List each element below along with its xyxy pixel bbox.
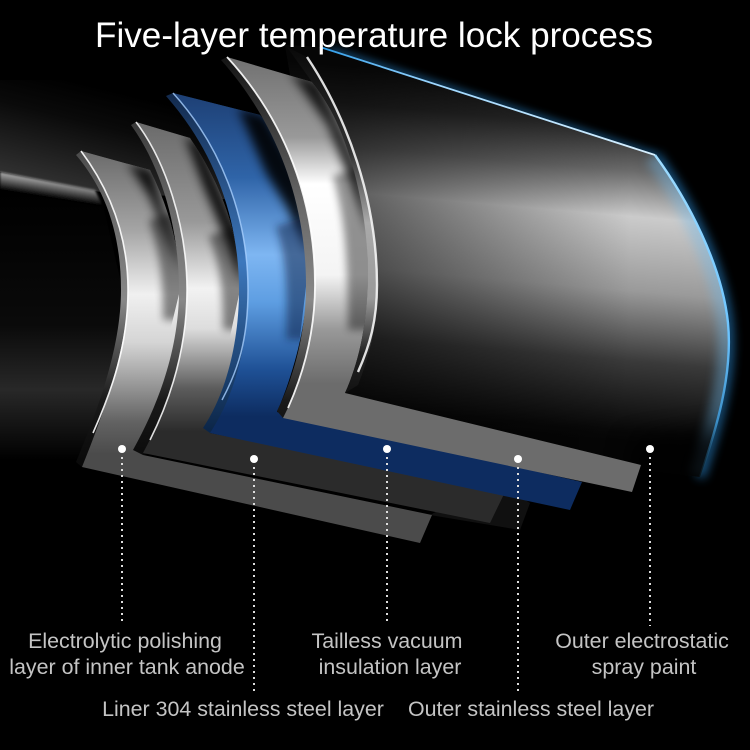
layer 2: liner 304 stainless steel [131, 122, 505, 523]
body surface [285, 45, 729, 477]
callout 1 [118, 445, 126, 622]
label: outer electrostatic spray paint: Outer electrostatic [555, 629, 729, 653]
callout 5 [646, 445, 654, 626]
callout 3 [383, 445, 391, 624]
callout dots and dotted leaders [118, 445, 654, 692]
layer 3: blue tailless vacuum insulation [166, 93, 582, 510]
label: outer electrostatic spray paint: spray paint [592, 655, 696, 679]
label: tailless vacuum insulation: Tailless vacuum [312, 629, 462, 653]
label: electrolytic polishing layer: Electrolytic polishing [28, 629, 222, 653]
layer 1: electrolytic polishing layer plate [76, 151, 432, 543]
label: liner 304 stainless steel: Liner 304 stainless steel layer [102, 697, 384, 721]
label: electrolytic polishing layer: layer of inner tank anode [9, 655, 245, 679]
callout 4 [514, 455, 522, 692]
glow lines [320, 47, 729, 477]
label: outer stainless steel: Outer stainless steel layer [408, 697, 654, 721]
label: tailless vacuum insulation: insulation layer [319, 655, 461, 679]
inner tank on left [0, 80, 240, 460]
title: Five-layer temperature lock process [95, 16, 653, 55]
outer tank body with blue glow [285, 45, 745, 500]
layer: inner plate shadow [430, 480, 530, 530]
layer 4: outer stainless steel [221, 57, 641, 492]
layer 5: outer spray paint rim [287, 47, 377, 393]
blue glow halo [330, 50, 729, 477]
callout 2 [250, 455, 258, 692]
